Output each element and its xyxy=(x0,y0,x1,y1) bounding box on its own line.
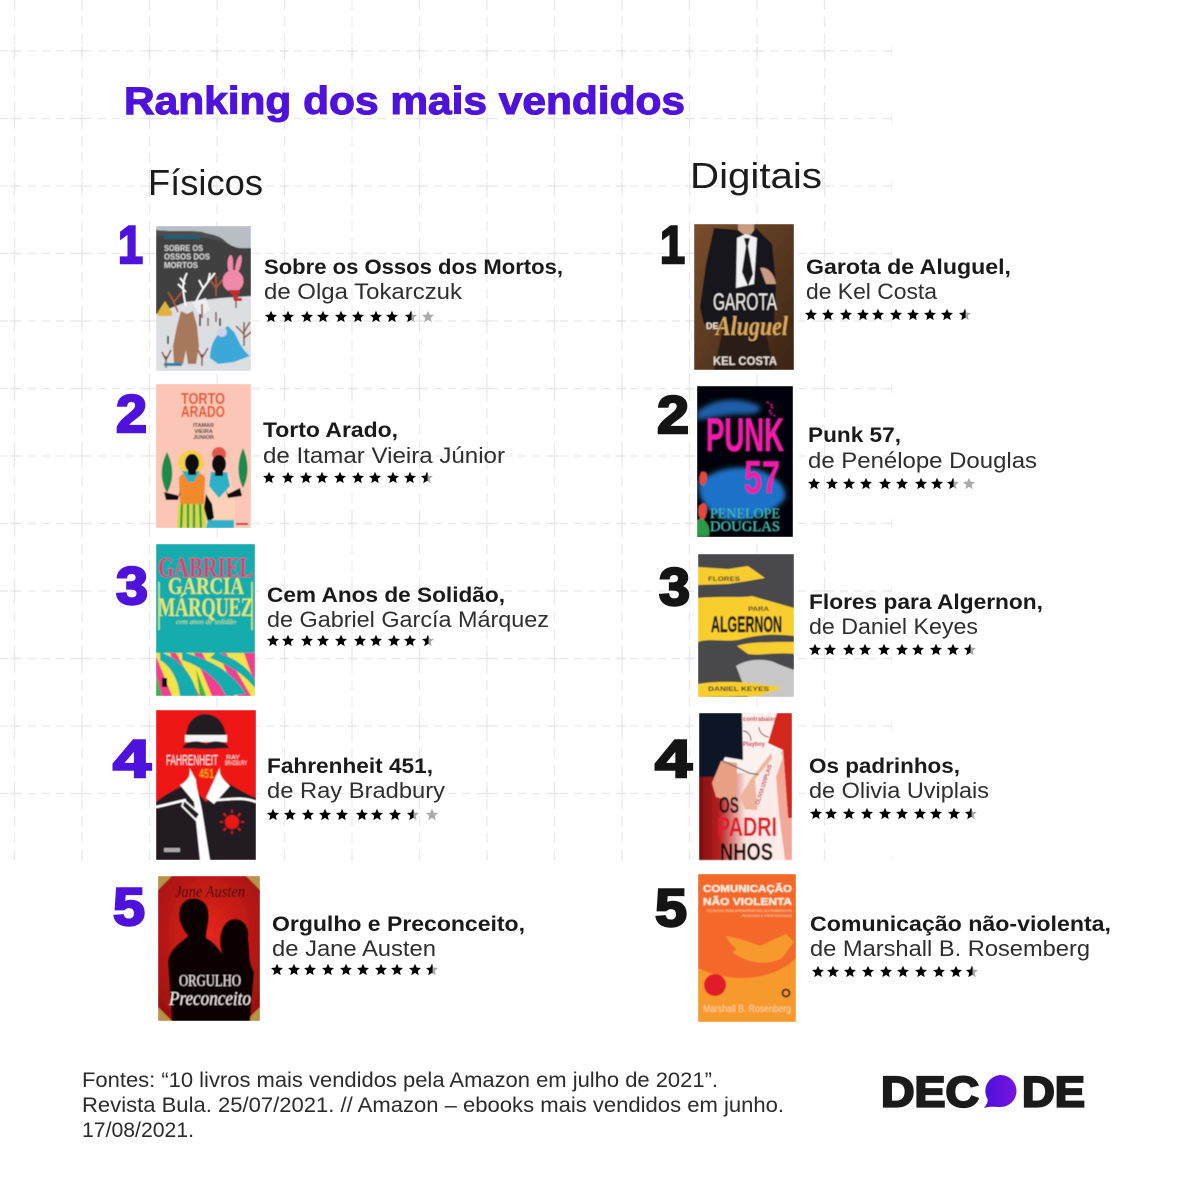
book cover: Orgulho e Preconceito: Preconceito xyxy=(168,988,251,1010)
star rating xyxy=(267,809,438,820)
rank number: 4 xyxy=(655,730,693,789)
rank number: 2 xyxy=(116,385,147,444)
book cover: Torto Arado: VIEIRA xyxy=(194,429,213,435)
star rating xyxy=(808,478,975,489)
book cover: Punk 57 xyxy=(697,386,793,537)
star rating xyxy=(271,964,438,975)
entry: digitais 1 xyxy=(660,216,1011,370)
book title and author: de Itamar Vieira Júnior xyxy=(263,443,505,468)
book title and author: Cem Anos de Solidão, xyxy=(267,584,505,607)
sources text xyxy=(82,1069,784,1142)
book cover: Comunicação não-violenta: NÃO VIOLENTA xyxy=(703,895,792,908)
book cover: Fahrenheit 451: FAHRENHEIT xyxy=(166,752,218,769)
book title and author: de Marshall B. Rosemberg xyxy=(810,936,1090,961)
entry: físicos 1 xyxy=(118,216,563,371)
book cover: Torto Arado xyxy=(156,384,251,528)
rank number: 2 xyxy=(657,386,689,445)
book cover: Garota de Aluguel: Aluguel xyxy=(714,311,788,341)
book cover: Torto Arado: TORTO xyxy=(181,391,225,408)
book title and author xyxy=(808,424,1037,473)
book cover: Orgulho e Preconceito: Jane Austen xyxy=(175,882,245,901)
book cover: Garota de Aluguel: KEL COSTA xyxy=(713,354,777,368)
book cover: Fahrenheit 451: BRADBURY xyxy=(225,761,247,767)
book cover: Cem Anos de Solidão xyxy=(156,544,255,696)
star rating xyxy=(263,472,433,483)
book cover: Os padrinhos: NHOS xyxy=(720,839,773,866)
book cover: Comunicação não-violenta: TÉCNICAS PARA APRIMORAR RELACIONAMENTOS xyxy=(706,908,793,913)
book cover: Sobre os Ossos dos Mortos xyxy=(156,226,251,371)
book cover: Fahrenheit 451: 451 xyxy=(199,766,214,781)
book cover: Cem Anos de Solidão: MÁRQUEZ xyxy=(158,593,253,622)
book cover: Garota de Aluguel: GAROTA xyxy=(713,289,777,316)
book title and author: de Jane Austen xyxy=(272,936,436,961)
book cover: Torto Arado: JUNIOR xyxy=(193,435,214,441)
title: Ranking dos mais vendidos xyxy=(124,80,685,123)
book cover: Comunicação não-violenta xyxy=(698,874,796,1022)
book cover: Orgulho e Preconceito xyxy=(158,876,260,1021)
book cover: Os padrinhos: OLIVIA UVIPLAIS xyxy=(755,764,774,806)
sources text: Revista Bula. 25/07/2021. // Amazon – ebooks mais vendidos em junho. xyxy=(82,1094,784,1117)
book title and author xyxy=(267,584,549,632)
rank number: 3 xyxy=(116,557,148,616)
book cover: Garota de Aluguel xyxy=(694,224,794,370)
book title and author: Flores para Algernon, xyxy=(809,591,1043,614)
rank number: 3 xyxy=(659,558,690,617)
icon: speech bubble xyxy=(984,1075,1017,1108)
book title and author: de Ray Bradbury xyxy=(267,778,445,803)
book cover: Punk 57: DOUGLAS xyxy=(710,519,780,535)
rank number: 1 xyxy=(118,216,143,275)
book title and author xyxy=(806,256,1011,304)
book title and author: de Penélope Douglas xyxy=(808,448,1037,473)
entry: digitais 4 xyxy=(655,713,989,866)
star rating xyxy=(810,808,977,819)
book title and author xyxy=(267,755,445,803)
book title and author xyxy=(263,419,505,468)
book title and author: de Kel Costa xyxy=(806,279,938,304)
book cover: Os padrinhos: Playboy xyxy=(743,742,766,748)
book title and author xyxy=(809,591,1043,639)
book cover: Os padrinhos: OS xyxy=(719,792,739,818)
entry: físicos 5 xyxy=(113,876,525,1021)
book cover: Orgulho e Preconceito: ORGULHO xyxy=(179,971,241,990)
book cover: Sobre os Ossos dos Mortos: SOBRE OS xyxy=(164,244,204,253)
book cover: Punk 57: PUNK xyxy=(706,408,784,461)
book cover: Comunicação não-violenta: COMUNICAÇÃO xyxy=(703,882,792,895)
book cover: Torto Arado: ITAMAR xyxy=(193,423,214,429)
book title and author: Sobre os Ossos dos Mortos, xyxy=(264,256,563,279)
book title and author xyxy=(810,913,1111,961)
book cover: Os padrinhos: contrabaixo xyxy=(743,717,777,723)
book cover: Fahrenheit 451 xyxy=(156,710,256,860)
entry: físicos 4 xyxy=(113,710,445,860)
book title and author: de Daniel Keyes xyxy=(809,614,978,639)
book title and author: Fahrenheit 451, xyxy=(267,755,433,778)
heading: Físicos: Físicos xyxy=(148,162,263,203)
star rating xyxy=(265,311,434,322)
book title and author: Punk 57, xyxy=(808,424,901,447)
book cover: Cem Anos de Solidão: GABRIEL xyxy=(158,553,253,584)
book cover: Flores para Algernon: PARA xyxy=(748,606,769,613)
star rating xyxy=(812,966,978,977)
book title and author xyxy=(272,913,525,961)
entry: físicos 2 xyxy=(116,384,505,528)
entry: digitais 2 xyxy=(657,386,1037,537)
logo: DECODE: DE xyxy=(1022,1068,1085,1116)
book cover: Flores para Algernon: ALGERNON xyxy=(711,612,782,637)
book cover: Cem Anos de Solidão: cem anos de solidão xyxy=(176,618,237,626)
book title and author xyxy=(809,755,989,803)
book title and author: Orgulho e Preconceito, xyxy=(272,913,525,936)
rank number: 5 xyxy=(113,878,145,937)
book cover: Fahrenheit 451: RAY xyxy=(226,755,240,761)
book title and author: de Gabriel García Márquez xyxy=(267,607,549,632)
rank number: 1 xyxy=(660,216,685,275)
logo: DECODE xyxy=(881,1068,1085,1116)
rank number: 5 xyxy=(655,879,687,938)
book cover: Flores para Algernon xyxy=(698,554,794,697)
book cover: Comunicação não-violenta: Marshall B. Rosenberg xyxy=(703,1004,791,1015)
book cover: Flores para Algernon: FLORES xyxy=(708,576,741,583)
book cover: Flores para Algernon: DANIEL KEYES xyxy=(708,686,770,693)
book title and author xyxy=(264,256,563,304)
book title and author: Os padrinhos, xyxy=(809,755,960,778)
book cover: Sobre os Ossos dos Mortos: MORTOS xyxy=(164,261,199,270)
book cover: Cem Anos de Solidão: GARCIA xyxy=(168,574,245,600)
logo: DECODE: DEC xyxy=(881,1068,979,1116)
book cover: Os padrinhos: PADRI xyxy=(717,812,777,842)
sources text: Fontes: “10 livros mais vendidos pela Amazon em julho de 2021”. xyxy=(82,1069,718,1092)
rank number: 4 xyxy=(113,730,152,789)
book cover: Sobre os Ossos dos Mortos: OSSOS DOS xyxy=(164,252,211,262)
star rating xyxy=(809,644,976,655)
book title and author: de Olga Tokarczuk xyxy=(264,279,463,304)
book title and author: Garota de Aluguel, xyxy=(806,256,1011,279)
entry: digitais 5 xyxy=(655,874,1111,1022)
sources text: 17/08/2021. xyxy=(82,1119,194,1142)
book cover: Comunicação não-violenta: PESSOAIS E PROFISSIONAIS xyxy=(742,914,793,918)
book title and author: Torto Arado, xyxy=(263,419,398,442)
book cover: Punk 57: PENELOPE xyxy=(710,506,780,522)
heading: Digitais: Digitais xyxy=(690,155,822,196)
star rating xyxy=(805,309,971,320)
book cover: Garota de Aluguel: DE xyxy=(706,321,719,331)
book title and author: de Olivia Uviplais xyxy=(809,778,989,803)
star rating xyxy=(267,635,434,646)
entry: físicos 3 xyxy=(116,544,549,696)
book cover: Punk 57: 57 xyxy=(744,451,780,503)
entry: digitais 3 xyxy=(659,554,1043,697)
book title and author: Comunicação não-violenta, xyxy=(810,913,1111,936)
book cover: Torto Arado: ARADO xyxy=(181,404,225,421)
book cover: Os padrinhos xyxy=(699,713,792,866)
